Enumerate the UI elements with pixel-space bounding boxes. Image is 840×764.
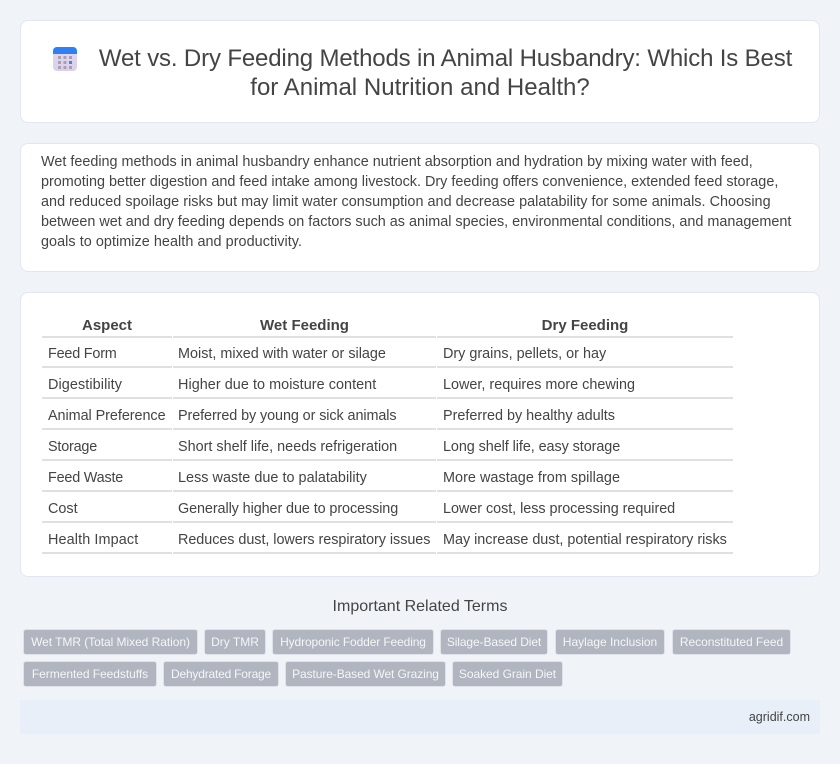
- table: wet vs dry comparison: Reduces dust, lowers respiratory issues: [178, 532, 430, 548]
- title: Wet vs. Dry Feeding Methods in Animal Husbandry: Which Is Best: [99, 45, 792, 72]
- table: wet vs dry comparison: Generally higher due to processing: [178, 501, 398, 517]
- panel: introduction text: between wet and dry feeding depends on factors such as animal species, environmental conditions, and management: [41, 214, 791, 230]
- table: wet vs dry comparison: Cost: [48, 501, 78, 517]
- related term chips: Dehydrated Forage: [171, 667, 271, 681]
- header panel: [20, 20, 820, 123]
- related term chips: Reconstituted Feed: [680, 635, 783, 649]
- table: wet vs dry comparison: Storage: [48, 439, 97, 455]
- title: for Animal Nutrition and Health?: [250, 74, 590, 101]
- table: wet vs dry comparison: Digestibility: [48, 377, 122, 393]
- related term chips: Dry TMR: [211, 635, 259, 649]
- table: wet vs dry comparison: Feed Form: [48, 346, 117, 362]
- table: wet vs dry comparison: Long shelf life, easy storage: [443, 439, 620, 455]
- panel: introduction text: goals to optimize health and productivity.: [41, 234, 302, 250]
- related term chips: [23, 629, 791, 687]
- footer: [20, 700, 820, 734]
- related term chips: Soaked Grain Diet: [459, 667, 556, 681]
- panel: introduction text: and reduced spoilage risks but may limit water consumption and decrease palatability for some animals. Choosing: [41, 194, 771, 210]
- title: [99, 45, 792, 101]
- table: wet vs dry comparison: Short shelf life, needs refrigeration: [178, 439, 397, 455]
- table: wet vs dry comparison: Animal Preference: [48, 408, 166, 424]
- table: wet vs dry comparison: Lower cost, less processing required: [443, 501, 675, 517]
- table: wet vs dry comparison: [42, 317, 733, 554]
- table: wet vs dry comparison: Lower, requires more chewing: [443, 377, 635, 393]
- table: wet vs dry comparison: Aspect: [82, 317, 132, 334]
- related term chips: Silage-Based Diet: [447, 635, 541, 649]
- source credit: agridif.com: [749, 710, 810, 724]
- table: wet vs dry comparison: Less waste due to palatability: [178, 470, 367, 486]
- table: wet vs dry comparison: Preferred by young or sick animals: [178, 408, 396, 424]
- table: wet vs dry comparison: Dry Feeding: [542, 317, 628, 334]
- related term chips: Hydroponic Fodder Feeding: [280, 635, 426, 649]
- table: wet vs dry comparison: Higher due to moisture content: [178, 377, 376, 393]
- related term chips: Haylage Inclusion: [563, 635, 657, 649]
- related term chips: Pasture-Based Wet Grazing: [292, 667, 439, 681]
- panel: introduction text: Wet feeding methods in animal husbandry enhance nutrient absorption and hydration by mixing water with feed,: [41, 154, 753, 170]
- panel: comparison table: [20, 292, 820, 577]
- table: wet vs dry comparison: May increase dust, potential respiratory risks: [443, 532, 727, 548]
- table: wet vs dry comparison: Feed Waste: [48, 470, 123, 486]
- table: wet vs dry comparison: Wet Feeding: [260, 317, 349, 334]
- related term chips: Fermented Feedstuffs: [32, 667, 148, 681]
- related term chips: Wet TMR (Total Mixed Ration): [31, 635, 190, 649]
- table: wet vs dry comparison: Preferred by healthy adults: [443, 408, 615, 424]
- panel: introduction text: promoting better digestion and feed intake among livestock. Dry feeding offers convenience, extended feed storage,: [41, 174, 778, 190]
- table: wet vs dry comparison: Health Impact: [48, 532, 138, 548]
- heading: related terms: Important Related Terms: [333, 598, 507, 615]
- table: wet vs dry comparison: Moist, mixed with water or silage: [178, 346, 386, 362]
- table: wet vs dry comparison: Dry grains, pellets, or hay: [443, 346, 606, 362]
- icon: calendar: [53, 47, 77, 71]
- panel: introduction text: [20, 143, 820, 272]
- table: wet vs dry comparison: More wastage from spillage: [443, 470, 620, 486]
